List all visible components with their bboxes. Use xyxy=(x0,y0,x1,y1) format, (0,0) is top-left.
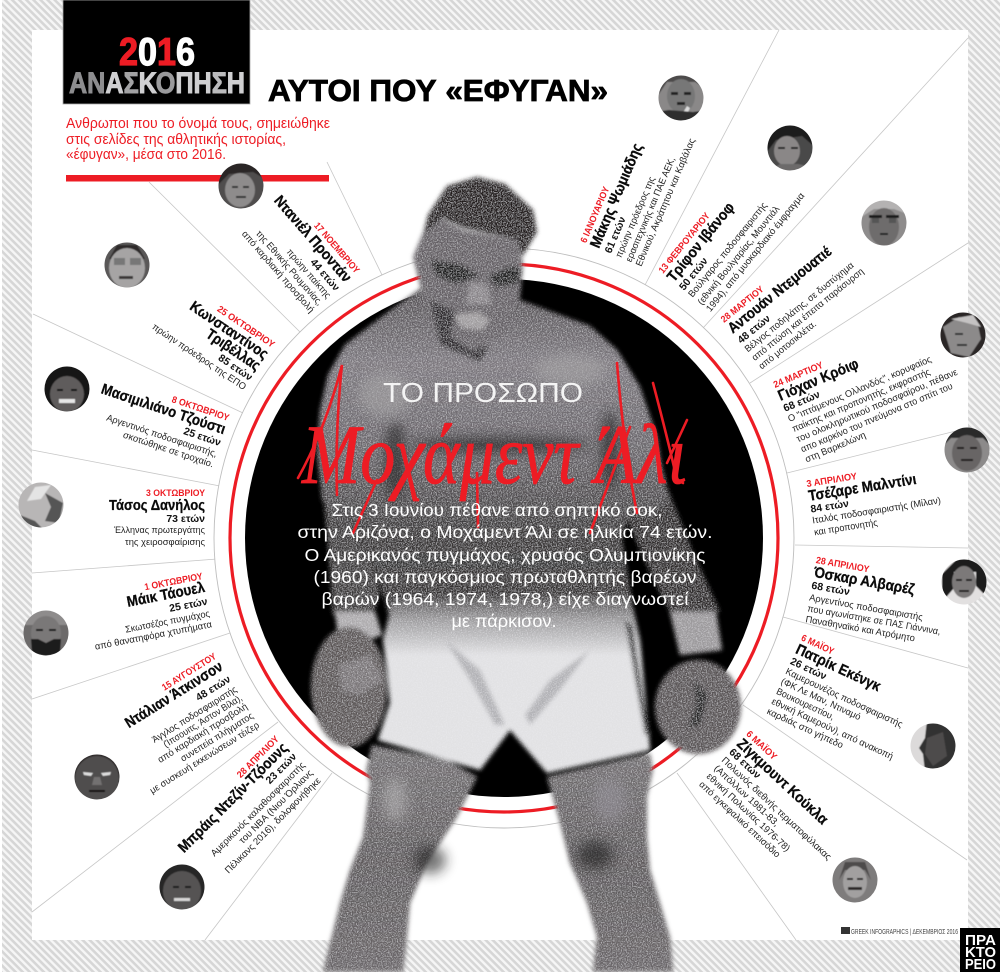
header badge: 2016 ΑΝΑΣΚΟΠΗΣΗ: ΑΝΑΣΚΟΠΗΣΗ xyxy=(69,67,245,100)
entry: Ντάλιαν Άτκινσον: Άγγλος ποδοσφαιριστής xyxy=(150,684,240,746)
entry: Τσέζαρε Μαλντίνι: Τσέζαρε Μαλντίνι xyxy=(807,471,917,505)
entry: Ζίγκμουντ Κούκλα: Πολωνός διεθνής τερματοφύλακας xyxy=(719,755,834,863)
header badge: 2016 ΑΝΑΣΚΟΠΗΣΗ: 2016 xyxy=(119,31,195,74)
main text: Στις 3 Ιουνίου πέθανε από σηπτικό σοκ, xyxy=(332,500,662,520)
entry: Γιόχαν Κρόιφ: Ο "ιπτάμενους Ολλανδός", κορυφαίος xyxy=(786,354,934,425)
entry: Κωνσταντίνος Τριβέλλας: Τριβέλλας xyxy=(203,326,264,375)
entry: Μπράις Ντεζίν-Τζόουνς: Πέλικανς 2016), δολοφονήθηκε xyxy=(223,775,324,876)
entry: Όσκαρ Αλβαρέζ: 68 ετών xyxy=(810,580,851,598)
entry: Μάκης Ψωμιάδης: 61 ετών xyxy=(603,215,629,255)
entry: Αντουάν Ντεμουατιέ: από μοτοσικλέτα. xyxy=(757,319,819,372)
entry: Τσέζαρε Μαλντίνι xyxy=(806,459,944,538)
entry: Ντάλιαν Άτκινσον: 48 ετών xyxy=(194,673,233,704)
entry: Τρίφον Ιβάνοφ: (εθνική Βουλγαρίας, Μουντιάλ xyxy=(696,204,782,307)
intro text: Ανθρωποι που το όνομά τους, σημειώθηκε xyxy=(66,116,331,132)
portrait: Ψωμιάδης xyxy=(658,76,704,120)
entry: Μασιμιλιάνο Τζούστι: Αργεντινός ποδοσφαιριστής, xyxy=(105,413,218,460)
portrait: Κρόιφ xyxy=(940,312,986,358)
portrait: Δανήλος xyxy=(18,482,64,528)
entry: Μασιμιλιάνο Τζούστι: 8 ΟΚΤΩΒΡΙΟΥ xyxy=(170,394,231,424)
right leg xyxy=(547,753,673,972)
entry: Μάικ Τάουελ: Σκωτσέζος πυγμάχος xyxy=(124,608,211,636)
face xyxy=(413,218,523,347)
entry: Ντάλιαν Άτκινσον: Ντάλιαν Άτκινσον xyxy=(122,658,226,732)
entry: Μπράις Ντεζίν-Τζόουνς: 23 ετών xyxy=(263,751,299,787)
main text: στην Αριζόνα, ο Μοχάμεντ Άλι σε ηλικία 74 ετών. xyxy=(298,522,712,542)
header badge: 2016 ΑΝΑΣΚΟΠΗΣΗ xyxy=(63,0,250,104)
figure shading: muscles and knee shadows xyxy=(359,354,626,874)
entry: Μπράις Ντεζίν-Τζόουνς xyxy=(169,733,324,888)
entry: Ντανιέλ Προντάν: 17 ΝΟΕΜΒΡΙΟΥ xyxy=(311,220,362,276)
heading: ΤΟ ΠΡΟΣΩΠΟ: ΤΟ ΠΡΟΣΩΠΟ xyxy=(383,377,583,408)
entry: Γιόχαν Κρόιφ xyxy=(772,312,969,465)
main text xyxy=(298,500,712,631)
entry: Ντάλιαν Άτκινσον: από καρδιακή προσβολή xyxy=(156,701,250,766)
shorts xyxy=(378,595,650,773)
entry: Κωνσταντίνος Τριβέλλας xyxy=(150,279,277,393)
entry: Μάκης Ψωμιάδης: ερασιτεχνικής και ΠΑΕ ΑΕΚ, xyxy=(624,156,678,264)
entry: Ζίγκμουντ Κούκλα: 6 ΜΑΪΟΥ xyxy=(744,729,779,763)
red signature: Μοχάμεντ Άλι xyxy=(298,363,687,533)
entry: Ζίγκμουντ Κούκλα: (Απόλλων 1981-83, xyxy=(712,763,781,829)
entry: Τάσος Δανήλος: 3 ΟΚΤΩΒΡΙΟΥ xyxy=(146,488,206,499)
portrait: Τζούστι xyxy=(44,366,90,412)
entry: Τάσος Δανήλος: Έλληνας πρωτεργάτης xyxy=(113,525,205,536)
entry: Όσκαρ Αλβαρέζ: Παναθηναϊκό και Ατρόμητο xyxy=(805,614,916,644)
entry: Πατρίκ Εκένγκ: (ΦΚ Λε Μαν, Ντιναμό xyxy=(779,676,862,723)
intro text: στις σελίδες της αθλητικής ιστορίας, xyxy=(66,132,286,148)
entry: Πατρίκ Εκένγκ: 6 ΜΑΪΟΥ xyxy=(799,633,836,658)
entry: Γιόχαν Κρόιφ: απο καρκίνο του πνεύμονα στο σπίτι του xyxy=(799,381,954,455)
portrait: Τριβέλλας xyxy=(104,242,150,288)
chin shadow xyxy=(430,300,490,362)
red rule xyxy=(66,175,329,182)
entry: Τάσος Δανήλος: 73 ετών xyxy=(166,513,205,525)
entry: Όσκαρ Αλβαρέζ xyxy=(804,555,950,648)
entry: Μπράις Ντεζίν-Τζόουνς: Μπράις Ντεζίν-Τζόουνς xyxy=(175,739,292,856)
entry: Κωνσταντίνος Τριβέλλας: 85 ετών xyxy=(216,352,255,384)
entry: Πατρίκ Εκένγκ xyxy=(765,633,924,772)
entry: Ζίγκμουντ Κούκλα: από εγκεφαλικό επεισόδιο xyxy=(696,779,782,860)
entry: Τρίφον Ιβάνοφ: Βούλγαρος ποδοσφαιριστής xyxy=(686,200,770,300)
entry: Πατρίκ Εκένγκ: Πατρίκ Εκένγκ xyxy=(793,641,884,695)
entry: Τρίφον Ιβάνοφ: 50 ετών xyxy=(677,255,711,293)
entry: Μασιμιλιάνο Τζούστι xyxy=(88,372,231,471)
entry: Μάκης Ψωμιάδης: πρώην πρόεδρος της xyxy=(614,175,658,260)
entry: Ζίγκμουντ Κούκλα: εθνική Πολωνίας 1976-78) xyxy=(704,771,792,854)
entry: Ντανιέλ Προντάν xyxy=(236,186,362,316)
main text: βαρών (1964, 1974, 1978,) είχε διαγνωστεί xyxy=(322,589,689,609)
entry: Μάκης Ψωμιάδης xyxy=(579,113,698,268)
logo: ΠΡΑΚΤΟΡΕΙΟ: ΚΤΟ xyxy=(965,944,996,961)
portrait: Αλβαρέζ xyxy=(942,560,986,604)
entry: Ντάλιαν Άτκινσον: (Ίπσουιτς, Άστον Βίλα), xyxy=(162,693,245,750)
main text: (1960) και παγκόσμιος πρωταθλητής βαρέων xyxy=(314,567,697,587)
portrait: Ντεμουατιέ xyxy=(862,200,906,246)
footer credit: GREEK INFOGRAPHICS | ΔΕΚΕΜΒΡΙΟΣ 2016 xyxy=(851,929,958,936)
left wrist tape xyxy=(335,612,382,650)
entry: Μάικ Τάουελ xyxy=(85,571,214,653)
entry: Τάσος Δανήλος xyxy=(109,488,206,548)
entry: Τσέζαρε Μαλντίνι: 84 ετών xyxy=(810,498,850,516)
entry: Αντουάν Ντεμουατιέ: 48 ετών xyxy=(735,313,773,346)
intro text xyxy=(66,116,331,163)
left glove xyxy=(311,627,387,747)
entry: Μάικ Τάουελ: 1 ΟΚΤΩΒΡΙΟΥ xyxy=(144,571,204,593)
entry: Ντάλιαν Άτκινσον: συνεπεία πλήγματος xyxy=(179,710,256,764)
entry: Μάικ Τάουελ: 25 ετών xyxy=(168,596,209,615)
hair xyxy=(423,177,537,257)
left leg xyxy=(323,745,477,972)
entry: Μάκης Ψωμιάδης: Μάκης Ψωμιάδης xyxy=(587,141,646,251)
entry: Γιόχαν Κρόιφ: 24 ΜΑΡΤΙΟΥ xyxy=(772,360,826,391)
entry: Τάσος Δανήλος: Τάσος Δανήλος xyxy=(109,497,205,514)
entry: Αντουάν Ντεμουατιέ: από πτώση και έπειτα παράσυρση xyxy=(750,266,866,363)
right glove xyxy=(655,660,741,754)
main text: με πάρκισον. xyxy=(452,611,556,631)
entry: Πατρίκ Εκένγκ: Βουκουρεστίου, xyxy=(774,686,836,723)
entry: Τσέζαρε Μαλντίνι: και προπονητής xyxy=(813,517,879,538)
main text: Ο Αμερικανός πυγμάχος, χρυσός Ολυμπιονίκης xyxy=(304,545,706,565)
entry: Αντουάν Ντεμουατιέ xyxy=(719,228,873,372)
entry: Γιόχαν Κρόιφ: στη Βαρκελώνη xyxy=(804,430,868,465)
entry: Ντανιέλ Προντάν: πρώην παίκτης xyxy=(284,247,333,301)
entry: Πατρίκ Εκένγκ: Καμερουνέζος ποδοσφαιριστής xyxy=(784,666,905,731)
entry: Τσέζαρε Μαλντίνι: 3 ΑΠΡΙΛΙΟΥ xyxy=(806,471,858,490)
entry: Μασιμιλιάνο Τζούστι: 25 ετών xyxy=(182,425,223,449)
entry: Πατρίκ Εκένγκ: καρδιάς στο γήπεδο xyxy=(765,706,845,751)
entry: Ντάλιαν Άτκινσον: με συσκευή εκκενώσεων τέιζερ xyxy=(148,720,262,797)
entry: Όσκαρ Αλβαρέζ: Όσκαρ Αλβαρέζ xyxy=(811,564,916,598)
entry: Ντάλιαν Άτκινσον: 15 ΑΥΓΟΥΣΤΟΥ xyxy=(160,651,219,693)
entry: Μπράις Ντεζίν-Τζόουνς: του ΝΒΑ (Νιου Όρλιανς xyxy=(237,767,316,846)
entry: Ζίγκμουντ Κούκλα xyxy=(696,729,858,887)
right wrist tape xyxy=(670,612,722,655)
title: ΑΥΤΟΙ ΠΟΥ «ΕΦΥΓΑΝ» xyxy=(268,73,608,108)
entry: Όσκαρ Αλβαρέζ: 28 ΑΠΡΙΛΙΟΥ xyxy=(815,555,871,575)
footer credit xyxy=(841,927,958,936)
entry: Ντανιέλ Προντάν: Ντανιέλ Προντάν xyxy=(270,192,355,286)
entry: Ζίγκμουντ Κούκλα: Ζίγκμουντ Κούκλα xyxy=(733,735,832,829)
entry: Μπράις Ντεζίν-Τζόουνς: 28 ΑΠΡΙΛΙΟΥ xyxy=(235,733,282,781)
entry: Τρίφον Ιβάνοφ: Τρίφον Ιβάνοφ xyxy=(664,199,738,285)
entry: Τρίφον Ιβάνοφ xyxy=(657,152,807,314)
entry: Μασιμιλιάνο Τζούστι: σκοτώθηκε σε τροχαίο. xyxy=(121,430,215,470)
entry: Αντουάν Ντεμουατιέ: 28 ΜΑΡΤΙΟΥ xyxy=(719,284,767,325)
entry: Μάκης Ψωμιάδης: 6 ΙΑΝΟΥΑΡΙΟΥ xyxy=(579,185,612,245)
portrait: Εκένγκ xyxy=(910,724,956,768)
torso and upper arms xyxy=(317,285,668,640)
photo: boxer figure xyxy=(311,177,741,972)
portrait: Άτκινσον xyxy=(74,754,120,800)
portrait: Κούκλα xyxy=(832,858,878,902)
mouth xyxy=(453,312,490,330)
entry: Αντουάν Ντεμουατιέ: Βέλγος ποδηλάτης, σε δυστύχημα xyxy=(743,260,857,355)
entry: Τσέζαρε Μαλντίνι: Ιταλός ποδοσφαιριστής (Μίλαν) xyxy=(812,495,942,527)
entry: Μάικ Τάουελ: από θανατηφόρα χτυπήματα xyxy=(94,619,213,653)
entry: Κωνσταντίνος Τριβέλλας: πρώην πρόεδρος της ΕΠΟ xyxy=(150,322,248,393)
portrait: Προντάν xyxy=(218,164,264,208)
entry: Τρίφον Ιβάνοφ: 13 ΦΕΒΡΟΥΑΡΙΟΥ xyxy=(657,210,713,276)
entry: Ντανιέλ Προντάν: 44 ετών xyxy=(307,257,342,294)
right forearm xyxy=(625,440,720,616)
entry: Γιόχαν Κρόιφ: του ολοκληρωτικού ποδοσφαίρου, πέθανε xyxy=(795,367,960,445)
entry: Μάκης Ψωμιάδης: Εθνικού, Ακράτητου και Καβάλας xyxy=(634,136,698,268)
entry: Ντανιέλ Προντάν: της Εθνικής Ρουμανίας, xyxy=(253,228,325,308)
entry: Μάικ Τάουελ: Μάικ Τάουελ xyxy=(125,579,207,611)
entry: Κωνσταντίνος Τριβέλλας: Κωνσταντίνος xyxy=(186,298,272,363)
entry: Κωνσταντίνος Τριβέλλας: 25 ΟΚΤΩΒΡΙΟΥ xyxy=(215,304,277,351)
logo: ΠΡΑΚΤΟΡΕΙΟ: ΠΡΑ xyxy=(965,932,996,949)
brow and eyes xyxy=(430,260,522,287)
nose xyxy=(466,282,492,304)
entry: Όσκαρ Αλβαρέζ: Αργεντίνος ποδοσφαιριστής xyxy=(808,593,924,623)
left forearm xyxy=(322,480,380,618)
entry: Μασιμιλιάνο Τζούστι: Μασιμιλιάνο Τζούστι xyxy=(99,381,228,438)
logo: ΠΡΑΚΤΟΡΕΙΟ xyxy=(960,928,1000,972)
entry: Μπράις Ντεζίν-Τζόουνς: Αμερικανός καλαθοσφαιριστής xyxy=(209,760,308,859)
entry: Πατρίκ Εκένγκ: 26 ετών xyxy=(788,655,829,683)
entry: Ντανιέλ Προντάν: από καρδιακή προσβολή xyxy=(239,229,316,315)
portrait: Ιβάνοφ xyxy=(768,126,812,170)
entry: Αντουάν Ντεμουατιέ: Αντουάν Ντεμουατιέ xyxy=(725,243,835,337)
entry: Γιόχαν Κρόιφ: παίκτης και προπονητής, εκφραστής xyxy=(791,366,932,435)
portrait: Τάουελ xyxy=(24,610,68,656)
entry: Όσκαρ Αλβαρέζ: που αγωνίστηκε σε ΠΑΣ Γιάννινα, xyxy=(806,603,941,638)
entry: Πατρίκ Εκένγκ: εθνική Καμερούν), από ανακοπή xyxy=(770,696,895,762)
central circle: outer ring, red ring, black disc xyxy=(214,248,794,828)
entry: Γιόχαν Κρόιφ: 68 ετών xyxy=(782,388,822,415)
portrait: Μαλντίνι xyxy=(944,428,990,472)
entry: Ζίγκμουντ Κούκλα: 68 ετών xyxy=(727,746,763,782)
entry: Γιόχαν Κρόιφ: Γιόχαν Κρόιφ xyxy=(775,355,861,405)
red signature: Μοχάμεντ Άλι: Μοχάμεντ Άλι xyxy=(301,409,687,503)
entry: Τάσος Δανήλος: της χειροσφαίρισης xyxy=(125,537,205,548)
entry: Τρίφον Ιβάνοφ: 1994), από μυοκαρδιακό έμφραγμα xyxy=(704,190,807,314)
portrait: Τζόουνς xyxy=(160,864,204,910)
entry: Ντάλιαν Άτκινσον xyxy=(105,651,262,797)
intro text: «έφυγαν», μέσα στο 2016. xyxy=(66,147,226,163)
